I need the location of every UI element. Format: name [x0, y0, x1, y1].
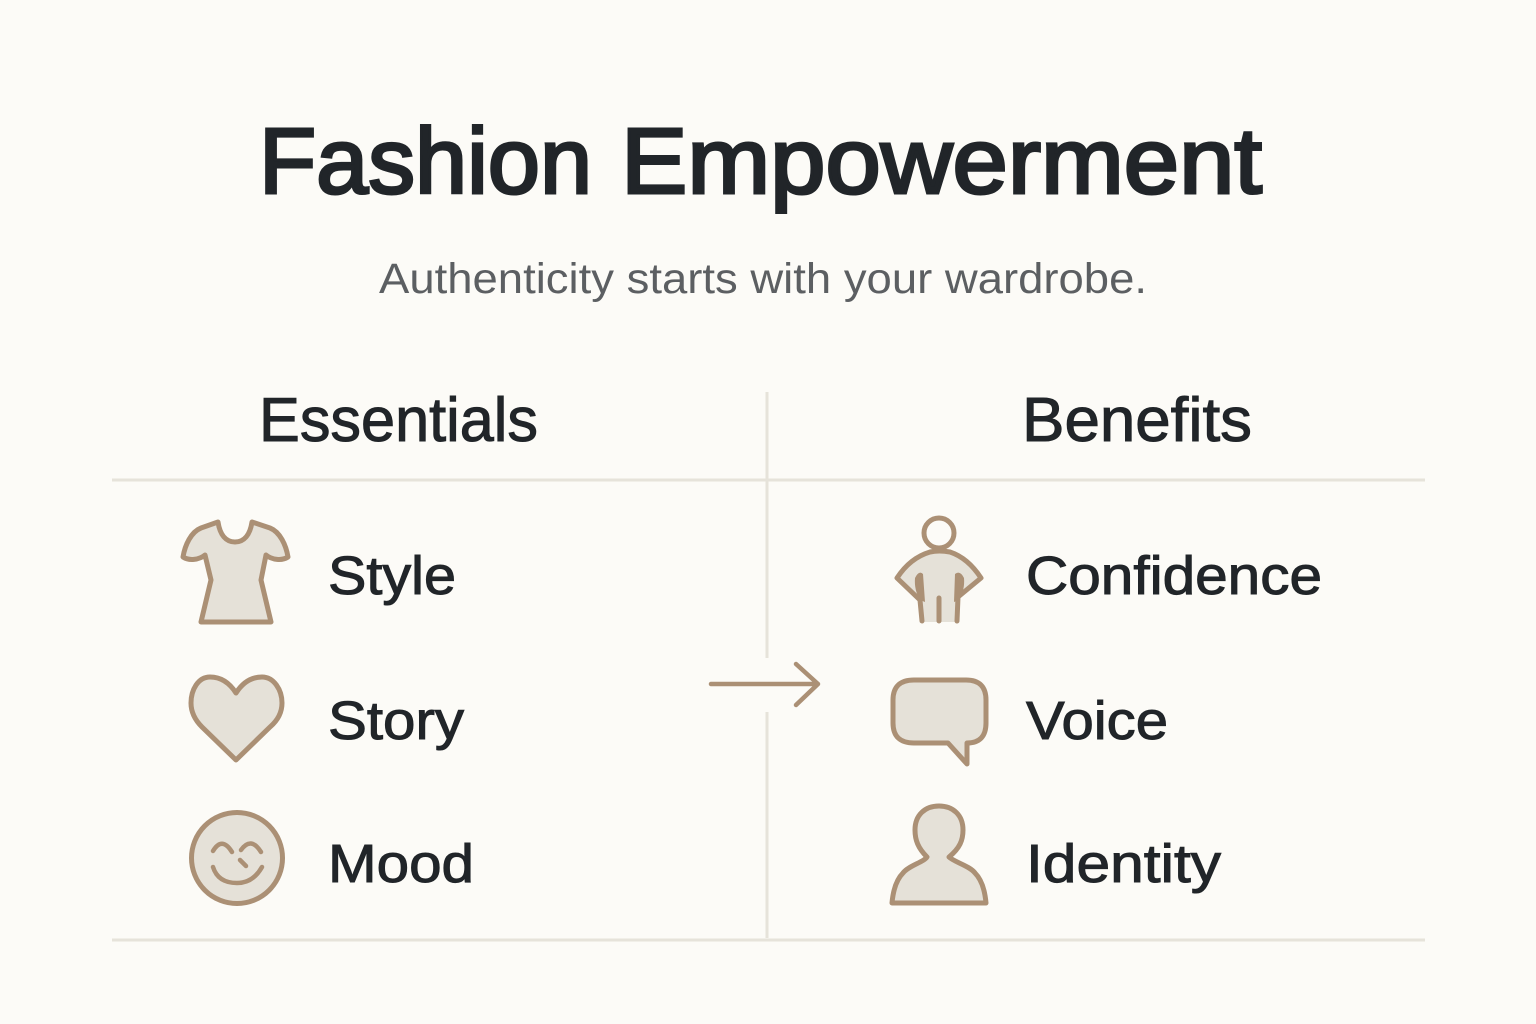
icon: speech bubble: [893, 680, 986, 764]
label: style: Style: [328, 546, 456, 606]
label: confidence: Confidence: [1026, 546, 1322, 606]
heading: benefits: Benefits: [1022, 386, 1252, 455]
title: Fashion: [259, 109, 592, 213]
label: identity: Identity: [1026, 834, 1221, 894]
icon: heart: [191, 677, 282, 760]
icon: person silhouette: [892, 806, 986, 903]
title: [259, 109, 1262, 213]
panel: benefits: [892, 386, 1322, 903]
arrow: [711, 664, 818, 705]
label: mood: Mood: [328, 834, 474, 894]
heading: essentials: Essentials: [259, 386, 538, 455]
icon: t-shirt: [183, 522, 288, 622]
icon: smiling face: [192, 812, 282, 904]
label: story: Story: [328, 691, 464, 751]
icon: confident person: [897, 518, 981, 622]
title: Empowerment: [621, 109, 1262, 213]
label: voice: Voice: [1026, 691, 1168, 751]
subtitle: Authenticity starts with your wardrobe.: [379, 255, 1147, 303]
panel: essentials: [183, 386, 538, 904]
